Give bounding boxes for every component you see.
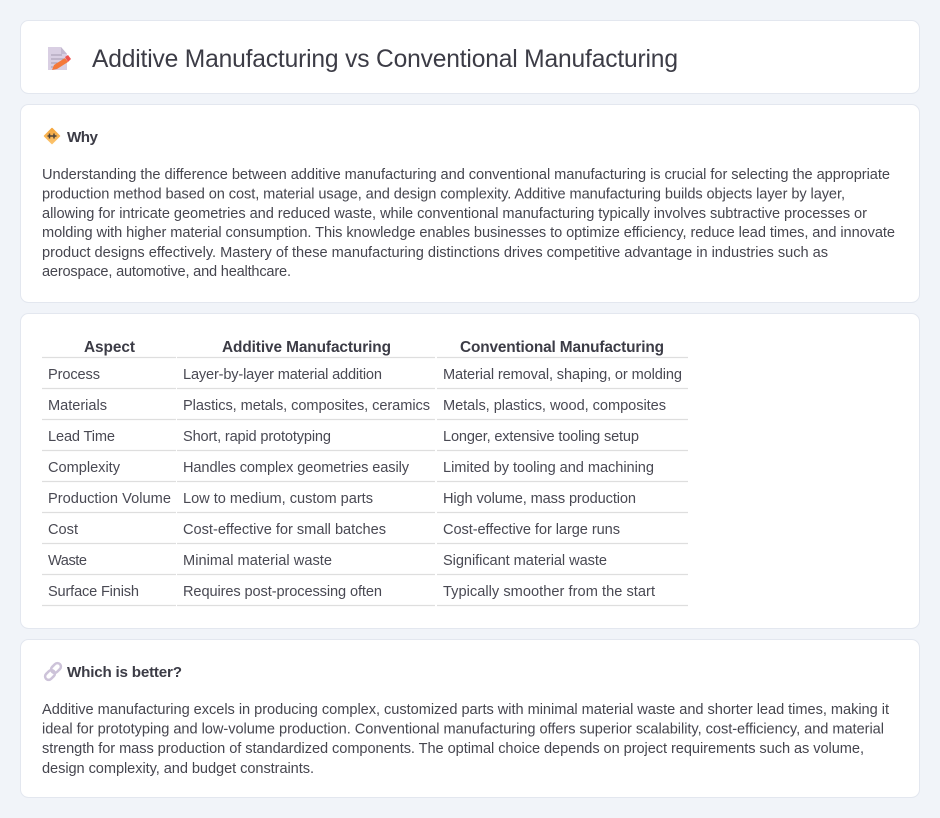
text block: why bbox=[42, 167, 895, 280]
text block: why: allowing for intricate geometries and reduced waste, while conventional manufacturing typically involves subtractive processes or bbox=[42, 206, 867, 222]
row: lead time: Longer, extensive tooling setup bbox=[443, 429, 639, 445]
text block: which is better: design complexity, and budget constraints. bbox=[42, 761, 314, 777]
row: complexity: Complexity bbox=[48, 460, 121, 476]
text block: why: molding with higher material consumption. This knowledge enables businesses to optimize efficiency, reduce lead times, and innovate bbox=[42, 225, 895, 241]
row: waste: Waste bbox=[48, 553, 87, 569]
row: waste bbox=[42, 553, 688, 574]
row: surface finish: Typically smoother from the start bbox=[443, 584, 655, 600]
row: process: Process bbox=[48, 367, 100, 383]
row: complexity: Handles complex geometries easily bbox=[183, 460, 410, 476]
row: waste: Significant material waste bbox=[443, 553, 607, 569]
row: complexity: Limited by tooling and machining bbox=[443, 460, 654, 476]
row: surface finish: Requires post-processing often bbox=[183, 584, 382, 600]
text block: which is better: ideal for prototyping and low-volume production. Conventional manufacturing offers superior scalability, cost-efficiency, and material bbox=[42, 722, 884, 738]
panel: why bbox=[20, 104, 920, 302]
row: cost bbox=[42, 522, 688, 544]
icon: diamond sign bbox=[44, 128, 60, 144]
text block: why: product designs effectively. Mastery of these manufacturing distinctions drives competitive advantage in industries such as bbox=[42, 245, 828, 261]
panel: header bbox=[20, 20, 920, 94]
row: cost: Cost bbox=[48, 522, 78, 538]
row: production volume: Production Volume bbox=[48, 491, 171, 507]
text block: which is better bbox=[42, 702, 889, 777]
row: complexity bbox=[42, 460, 688, 482]
text block: which is better: Additive manufacturing excels in producing complex, customized parts with minimal material waste and shorter lead times, making it bbox=[42, 702, 889, 718]
table header row: Aspect bbox=[84, 339, 135, 356]
panel: comparison table bbox=[20, 314, 920, 628]
text block: which is better: strength for mass production of standardized components. The optimal choice depends on project requirements such as volume, bbox=[42, 741, 864, 757]
icon: document with pencil bbox=[48, 47, 71, 70]
text block: why: aerospace, automotive, and healthcare. bbox=[42, 264, 291, 280]
text block: why: Understanding the difference between additive manufacturing and conventional manufacturing is crucial for selecting the appropriate bbox=[42, 167, 890, 183]
table header row: Conventional Manufacturing bbox=[460, 339, 664, 356]
row: production volume bbox=[42, 491, 688, 512]
table header row bbox=[42, 339, 688, 358]
row: surface finish: Surface Finish bbox=[48, 584, 139, 600]
row: lead time bbox=[42, 429, 688, 450]
row: cost: Cost-effective for large runs bbox=[443, 522, 620, 538]
text block: why: production method based on cost, material usage, and design complexity. Additive manufacturing builds objects layer by layer, bbox=[42, 186, 845, 202]
row: lead time: Lead Time bbox=[48, 429, 115, 445]
row: process: Layer-by-layer material addition bbox=[183, 367, 382, 383]
heading: which is better: Which is better? bbox=[67, 664, 182, 681]
row: waste: Minimal material waste bbox=[183, 553, 332, 569]
row: materials: Plastics, metals, composites, ceramics bbox=[183, 398, 430, 414]
panel: which is better bbox=[20, 640, 920, 798]
row: lead time: Short, rapid prototyping bbox=[183, 429, 331, 445]
row: materials bbox=[42, 398, 688, 420]
heading: why: Why bbox=[67, 129, 99, 146]
row: production volume: High volume, mass production bbox=[443, 491, 636, 507]
row: surface finish bbox=[42, 584, 688, 606]
title: Additive Manufacturing vs Conventional Manufacturing bbox=[92, 46, 678, 73]
row: process bbox=[42, 367, 688, 388]
row: materials: Materials bbox=[48, 398, 107, 414]
row: cost: Cost-effective for small batches bbox=[183, 522, 386, 538]
row: process: Material removal, shaping, or molding bbox=[443, 367, 682, 383]
icon: chain link bbox=[44, 662, 62, 681]
row: materials: Metals, plastics, wood, composites bbox=[443, 398, 666, 414]
row: production volume: Low to medium, custom parts bbox=[183, 491, 373, 507]
table header row: Additive Manufacturing bbox=[222, 339, 391, 356]
